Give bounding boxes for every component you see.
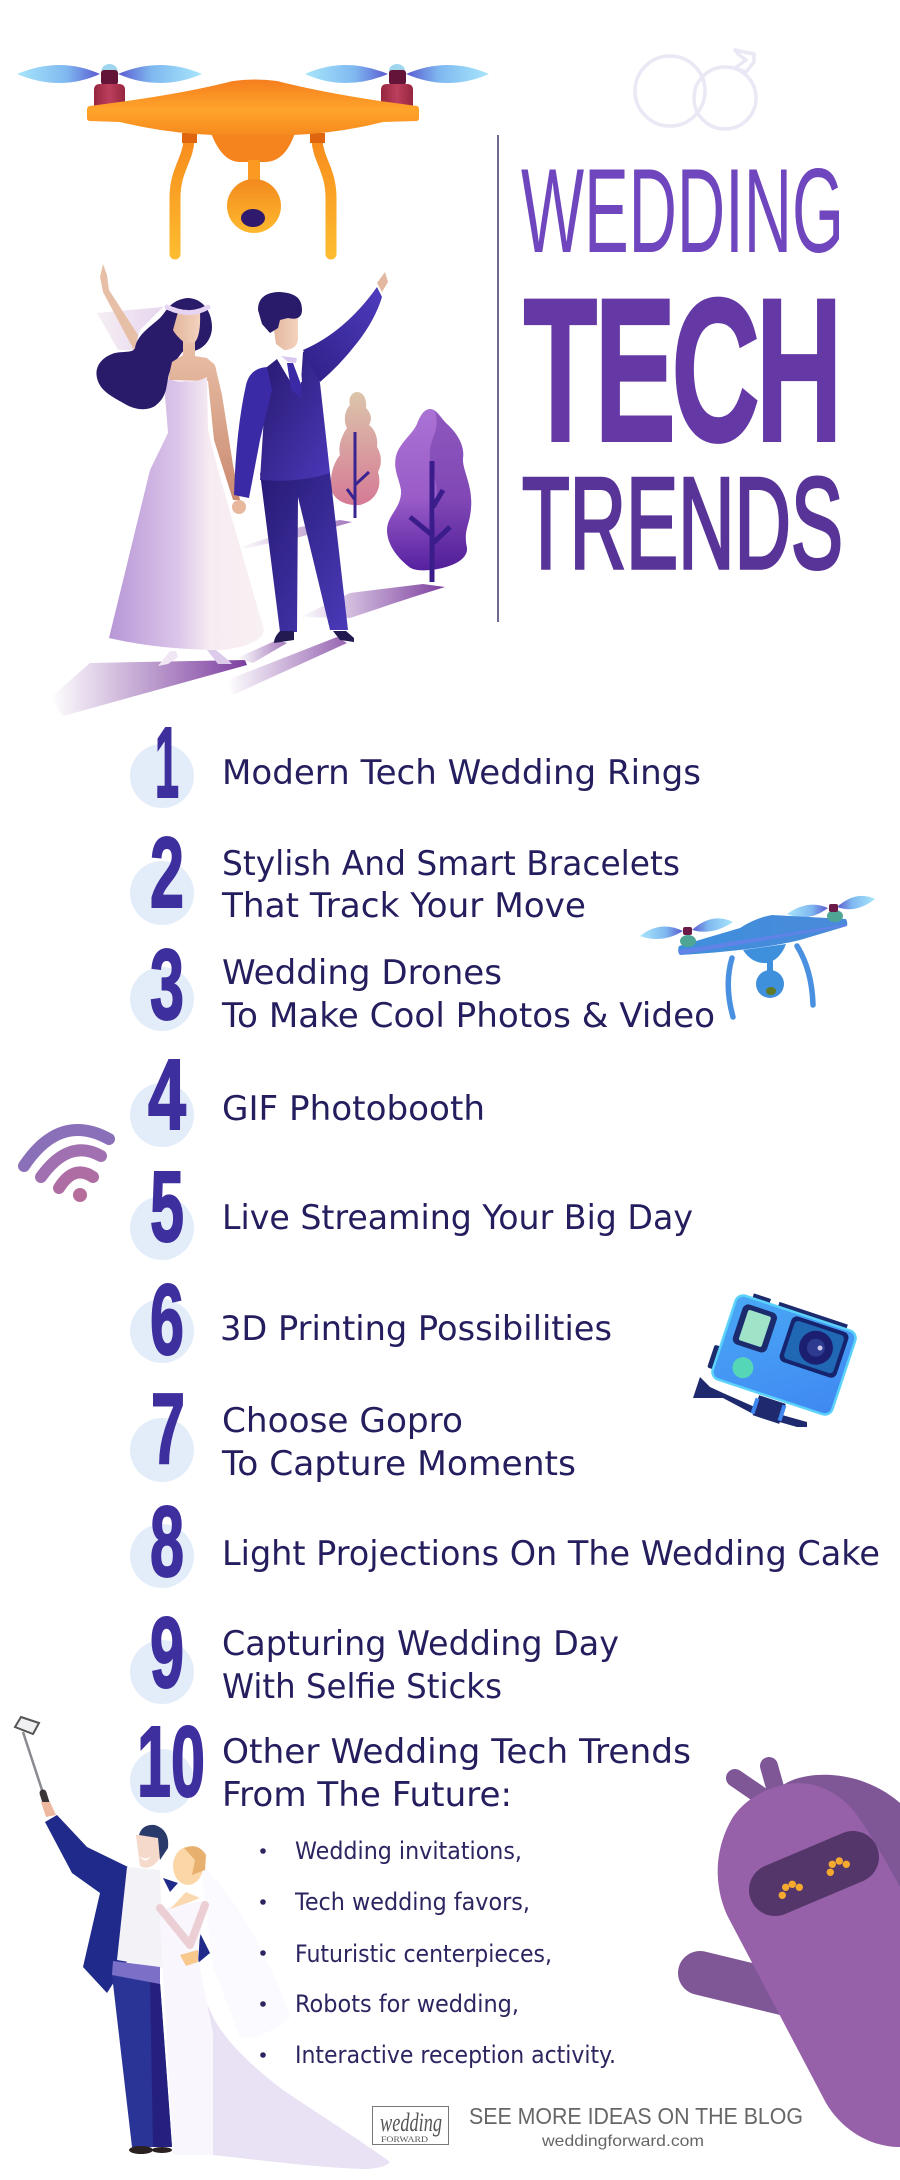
robot visor (775, 1857, 853, 1890)
bride (96, 264, 264, 666)
camera gimbal (211, 133, 295, 233)
divider line (497, 135, 499, 622)
camera mount (693, 1377, 807, 1427)
tree: pink (331, 392, 381, 518)
groom hair (258, 292, 302, 333)
text 10: From The Future: (222, 1775, 512, 1815)
landing legs (175, 133, 331, 254)
veil and train (187, 1863, 390, 2169)
number 5: 5 (150, 1151, 184, 1263)
number 7: 7 (151, 1373, 185, 1485)
number 6: 6 (150, 1264, 184, 1376)
groom pants (260, 473, 348, 632)
footer text: weddingforward.com (541, 2133, 704, 2150)
groom left arm (234, 367, 272, 498)
list item 10 (137, 1706, 691, 1818)
text 1: Modern Tech Wedding Rings (222, 753, 701, 793)
sub-list bullets (260, 1837, 616, 2069)
number 3: 3 (150, 929, 184, 1041)
hair crown (167, 307, 208, 312)
bride head (173, 1847, 203, 1885)
illustration: selfie couple (15, 1717, 390, 2169)
groom shirt (117, 1867, 163, 1968)
sub-list bullets: Interactive reception activity. (295, 2041, 616, 2069)
icon: wedding rings (635, 50, 756, 129)
logo box: wedding (380, 2108, 442, 2137)
number 10: 10 (137, 1706, 205, 1818)
text 3: To Make Cool Photos & Video (221, 996, 715, 1036)
groom jacket (260, 350, 330, 481)
robot antennas (735, 1766, 778, 1802)
ground shadows (50, 520, 445, 716)
list item 7 (151, 1373, 576, 1485)
footer text: SEE MORE IDEAS ON THE BLOG (469, 2103, 803, 2129)
bride hair (184, 1846, 206, 1875)
icon: purple robot (700, 1766, 900, 2147)
bride dress (109, 377, 264, 650)
icon: orange drone (17, 64, 489, 254)
bride chest (170, 1892, 200, 1909)
logo box (372, 2106, 448, 2144)
list item 3 (150, 929, 715, 1041)
groom (232, 272, 388, 643)
groom pants (112, 1975, 172, 2147)
robot back (783, 1775, 900, 2000)
sub-list bullets: Wedding invitations, (295, 1837, 522, 1865)
groom hand holding (232, 500, 246, 514)
list item 6 (150, 1264, 612, 1376)
icon: blue drone (640, 896, 875, 1017)
sub-list bullets: Robots for wedding, (295, 1990, 519, 2018)
groom shoes (129, 2146, 172, 2154)
text 3: Wedding Drones (222, 953, 502, 993)
list item 4 (148, 1039, 485, 1151)
text 9: Capturing Wedding Day (222, 1624, 619, 1664)
text 9: With Selfie Sticks (222, 1667, 502, 1707)
footer text (469, 2103, 803, 2150)
sub-list bullets: Tech wedding favors, (294, 1888, 530, 1916)
groom head (136, 1835, 160, 1868)
icon: wifi (24, 1130, 109, 1202)
robot body (718, 1783, 900, 2147)
camera body (705, 1287, 859, 1417)
text 2: That Track Your Move (221, 886, 586, 926)
groom jacket (45, 1815, 128, 1993)
propellers (17, 64, 489, 106)
cummerbund (112, 1961, 160, 1984)
text 6: 3D Printing Possibilities (220, 1309, 612, 1349)
groom head (272, 317, 298, 350)
text 7: To Capture Moments (221, 1444, 576, 1484)
robot eyes (779, 1857, 850, 1899)
groom sleeve behind bride (163, 1878, 210, 1963)
number 9: 9 (150, 1597, 184, 1709)
icon: action camera (693, 1287, 859, 1427)
groom hand (377, 272, 388, 292)
list item 1: 1 (155, 707, 179, 819)
bride raised arm (100, 264, 138, 352)
title (521, 144, 844, 596)
selfie stick (15, 1717, 56, 1817)
robot arm (700, 1973, 795, 1996)
text 10: Other Wedding Tech Trends (222, 1732, 691, 1772)
bride shoes (158, 650, 232, 666)
text 2: Stylish And Smart Bracelets (222, 844, 680, 884)
list item 8 (150, 1486, 880, 1598)
sub-list bullets: Futuristic centerpieces, (295, 1940, 552, 1968)
illustration: bride and groom (50, 264, 471, 716)
bride dress (160, 1900, 213, 2155)
groom hair (139, 1825, 168, 1860)
bride hair (96, 298, 212, 409)
groom shoes (274, 631, 354, 643)
bride hand (180, 1950, 198, 1966)
bride body skin (168, 338, 240, 500)
groom smile (139, 1856, 151, 1860)
logo box: FORWARD (381, 2135, 428, 2144)
bride arm (160, 1905, 205, 1945)
list number circles (130, 744, 194, 1813)
drone body (87, 80, 419, 135)
groom raised arm (303, 287, 382, 382)
list item 9 (150, 1597, 619, 1709)
number 8: 8 (150, 1486, 184, 1598)
text 4: GIF Photobooth (222, 1089, 485, 1129)
tree: purple (387, 409, 471, 582)
bride face (173, 312, 200, 344)
list item 2 (150, 817, 680, 929)
number 4: 4 (148, 1039, 186, 1151)
text 7: Choose Gopro (222, 1401, 463, 1441)
list item 1 (155, 707, 701, 819)
text 8: Light Projections On The Wedding Cake (222, 1534, 880, 1574)
number 2: 2 (150, 817, 184, 929)
text 5: Live Streaming Your Big Day (222, 1198, 693, 1238)
bride veil (97, 307, 163, 350)
groom shirt and tie (277, 355, 302, 397)
list item 5 (150, 1151, 693, 1263)
